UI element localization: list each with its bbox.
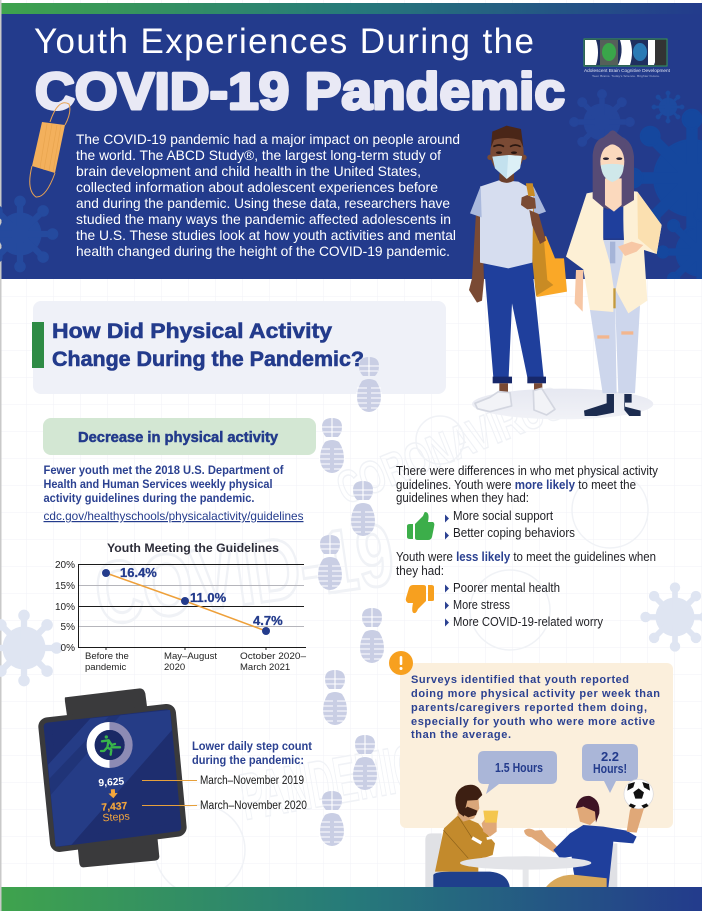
speech bubble: youth: Hours! [593, 761, 627, 776]
list: less likely [445, 581, 604, 629]
callout text [411, 674, 660, 741]
intro paragraph: The COVID-19 pandemic had a major impact on people around [76, 132, 460, 147]
x axis labels [85, 651, 307, 673]
step counts: 7,437 [101, 801, 128, 814]
callout text: especially for youth who were more active [411, 716, 655, 728]
girl [566, 130, 662, 416]
illustration: two masked students [469, 126, 662, 419]
guidelines link: cdc.gov/healthyschools/physicalactivity/guidelines [44, 509, 304, 523]
text block: less likely: they had: [396, 564, 444, 578]
main title line 1: Youth Experiences During the [34, 22, 534, 61]
icon: alert [389, 651, 413, 675]
table [460, 856, 591, 888]
icon: soccer ball [624, 779, 653, 809]
intro paragraph: studied the many ways the pandemic affected adolescents in [76, 212, 451, 227]
parent [433, 785, 510, 888]
x axis labels: pandemic [85, 662, 126, 673]
list: more likely: More social support [453, 509, 553, 523]
line chart: youth meeting the guidelines [55, 541, 307, 673]
faint background doodles: PANDEMIC [235, 730, 425, 834]
icon: smartwatch with steps [43, 688, 177, 867]
text block: guidelines: activity guidelines during the pandemic. [44, 491, 254, 505]
line chart: youth meeting the guidelines: 10% [55, 602, 75, 613]
section heading text [52, 320, 364, 371]
boy [469, 126, 567, 415]
list: more likely: Better coping behaviors [453, 526, 575, 540]
faint background doodles: CORONAVIRUS [329, 376, 571, 514]
footprints trail [317, 357, 385, 846]
text block: differences more likely: There were differences in who met physical activity [396, 464, 659, 478]
line chart: youth meeting the guidelines: 15% [55, 581, 75, 592]
youth [524, 796, 645, 888]
header panel [0, 14, 702, 295]
section heading panel [32, 301, 446, 394]
icon: face mask [30, 103, 70, 197]
data labels: 16.4% [120, 565, 157, 580]
text block: differences more likely: guidelines. Youth were more likely to meet the [396, 478, 636, 492]
logo: Adolescent Brain Cognitive Development [584, 68, 671, 73]
logo [584, 39, 671, 78]
intro paragraph: and during the pandemic. Using these data, researchers have [76, 196, 450, 211]
list: less likely: Poorer mental health [453, 581, 560, 595]
list: more likely [445, 509, 575, 540]
subheading pill: Decrease in physical activity [78, 429, 279, 446]
text block: daily step count: March–November 2019 [200, 775, 304, 787]
trend line [106, 573, 266, 631]
x axis labels: 2020 [164, 662, 185, 673]
line chart: youth meeting the guidelines: 20% [55, 560, 75, 571]
callout text: doing more physical activity per week than [411, 688, 660, 700]
callout text: Surveys identified that youth reported [411, 674, 629, 686]
icon: thumbs down [406, 585, 434, 613]
intro paragraph: the U.S. These studies look at how youth activities and mental [76, 228, 456, 243]
illustration: parent and youth at table [425, 779, 653, 888]
data labels [120, 565, 283, 628]
text block: daily step count: Lower daily step count [192, 739, 312, 753]
speech bubble: parent: 1.5 Hours [495, 760, 543, 775]
icon: runner [101, 735, 120, 755]
faint background doodles [89, 376, 675, 895]
text block: daily step count: March–November 2020 [200, 800, 307, 812]
chart title: Youth Meeting the Guidelines [107, 541, 279, 555]
page viruses [0, 583, 702, 686]
text block: guidelines [44, 463, 284, 505]
text block: differences more likely: guidelines when they had: [396, 491, 529, 505]
callout text: than the average. [411, 729, 511, 741]
intro paragraph: health changed during the height of the COVID-19 pandemic. [76, 244, 450, 259]
intro paragraph: the world. The ABCD Study®, the largest long-term study of [76, 148, 441, 163]
section heading text: How Did Physical Activity [52, 320, 332, 343]
text block: guidelines: Health and Human Services weekly physical [44, 477, 272, 491]
callout text: parents/caregivers reported them doing, [411, 702, 647, 714]
step counts [98, 776, 130, 824]
x axis labels: October 2020– [240, 651, 307, 662]
logo: Teen Brains. Today's Science. Brighter Future. [592, 74, 660, 78]
text block: daily step count [142, 739, 312, 812]
list: less likely: More stress [453, 598, 510, 612]
text block: differences more likely [396, 464, 659, 505]
chairs [425, 833, 442, 888]
text block: guidelines: Fewer youth met the 2018 U.S. Department of [44, 463, 284, 477]
data labels: 11.0% [190, 590, 227, 605]
section heading accent bar [32, 322, 44, 368]
data points [102, 569, 270, 635]
main title line 2: COVID-19 Pandemic [35, 63, 565, 121]
speech bubble: youth [582, 744, 638, 793]
progress ring [91, 726, 129, 764]
line chart: youth meeting the guidelines: 5% [61, 622, 75, 633]
intro paragraph [76, 132, 460, 259]
text block: less likely: Youth were less likely to meet the guidelines when [396, 550, 656, 564]
faint background doodles: COVID-19 [89, 504, 400, 644]
text block: less likely [396, 550, 656, 578]
line chart: youth meeting the guidelines: 0% [61, 643, 75, 654]
bottom gradient bar [2, 887, 702, 911]
list: less likely: More COVID-19-related worry [453, 615, 604, 629]
data labels: 4.7% [253, 613, 283, 628]
step counts: 9,625 [98, 776, 125, 789]
text block: daily step count: during the pandemic: [192, 753, 304, 767]
intro paragraph: brain development and child health in the United States, [76, 164, 421, 179]
speech bubble: parent [478, 751, 557, 794]
top gradient bar [2, 3, 702, 14]
subheading pill [43, 418, 316, 455]
x axis labels: March 2021 [240, 662, 290, 673]
x axis labels: Before the [85, 651, 129, 662]
callout panel [389, 651, 673, 828]
step counts: Steps [102, 811, 130, 824]
intro paragraph: collected information about adolescent experiences before [76, 180, 438, 195]
x axis labels: May–August [164, 651, 217, 662]
icon: thumbs up [407, 512, 434, 540]
speech bubble: youth: 2.2 [601, 749, 619, 764]
header background viruses [0, 90, 702, 295]
section heading text: Change During the Pandemic? [52, 348, 364, 371]
